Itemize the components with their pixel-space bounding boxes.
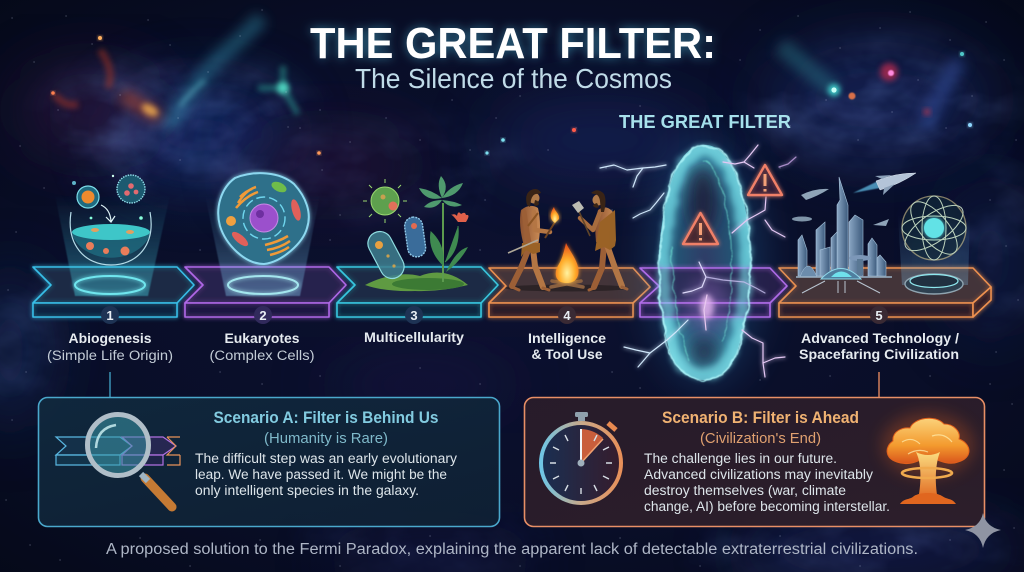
scenario B body [644,451,890,514]
left figure [508,189,559,290]
label: abiogenesis [47,331,173,363]
step 2 number [254,306,272,324]
label: advanced technology: Advanced Technology / [801,331,959,346]
label: abiogenesis: (Simple Life Origin) [47,348,173,363]
icon: warning triangle upper [748,165,782,195]
step 3 number [405,306,423,324]
right figure [572,190,627,290]
connector to scenario B [878,372,880,397]
label: eukaryotes [210,331,314,363]
chevron 2 [185,267,346,317]
label: intelligence: & Tool Use [532,347,603,362]
step 4 number [558,306,576,324]
icon: sparkle watermark [965,513,1001,548]
scenario B subheading: (Civilization's End) [700,430,821,447]
step 3 number: 3 [410,308,418,323]
label: abiogenesis: Abiogenesis [68,331,152,346]
scenario A body: only intelligent species in the galaxy. [195,483,419,498]
icon: mushroom cloud [882,413,974,504]
scenario A subheading: (Humanity is Rare) [264,430,388,447]
step 5 number: 5 [875,308,883,323]
purple chevron inside portal [640,268,787,317]
campfire [551,243,583,287]
icon: rocket [853,173,916,195]
timeline chevrons [33,267,991,317]
icon: small saucer [792,216,812,222]
label: advanced technology: Spacefaring Civilization [799,347,959,362]
label: intelligence [528,331,607,362]
step 5 number [870,306,888,324]
panel: scenario B [524,398,984,526]
chevron 1 [33,267,194,317]
step 2 number: 2 [259,308,267,323]
step 1 number [101,306,119,324]
portal rim [659,145,751,380]
panel: scenario A [38,398,500,526]
icon: warning triangle lower [683,213,718,244]
title: THE GREAT FILTER: [310,19,716,68]
filter heading: THE GREAT FILTER [619,112,791,132]
label: intelligence: Intelligence [528,331,607,346]
icon: magnifying glass over timeline [56,414,180,507]
scenario B heading: Scenario B: Filter is Ahead [662,409,859,427]
chevron 4 [489,268,650,317]
step 1 number: 1 [106,308,114,323]
scenario A body: leap. We have passed it. We might be the [195,467,447,482]
icon: futuristic city and ships [792,173,916,293]
icon: abiogenesis flask [55,175,170,296]
label: advanced technology [799,331,959,362]
scenario A heading: Scenario A: Filter is Behind Us [214,409,438,427]
icon: delta ship [873,219,889,226]
icon: orbital sphere on pedestal [898,194,970,294]
subtitle: The Silence of the Cosmos [355,63,672,94]
scenario B body: change, AI) before becoming interstellar. [644,499,890,514]
lightning bolts [600,145,796,377]
icon: early humans at fire [505,189,629,292]
icon: multicellular life [363,176,468,291]
label: eukaryotes: Eukaryotes [224,331,300,346]
scenario A body: The difficult step was an early evolutionary [195,451,457,466]
icon: small ship [801,189,829,200]
chevron 3 [337,267,498,317]
scenario B body: destroy themselves (war, climate [644,483,846,498]
footer caption: A proposed solution to the Fermi Paradox, explaining the apparent lack of detectable extraterrestrial civilizations. [106,541,918,558]
label: multicellularity: Multicellularity [364,330,465,345]
step 4 number: 4 [563,308,571,323]
icon: stopwatch [541,412,621,503]
icon: eukaryote cell [205,173,320,296]
connector to scenario A [109,372,111,397]
scenario B body: Advanced civilizations may inevitably [644,467,873,482]
chevron 5 [779,268,991,317]
scenario B body: The challenge lies in our future. [644,451,837,466]
scenario A body [195,451,457,498]
the great filter portal [600,138,796,386]
label: eukaryotes: (Complex Cells) [210,348,314,363]
portal soft rim band [664,150,746,375]
